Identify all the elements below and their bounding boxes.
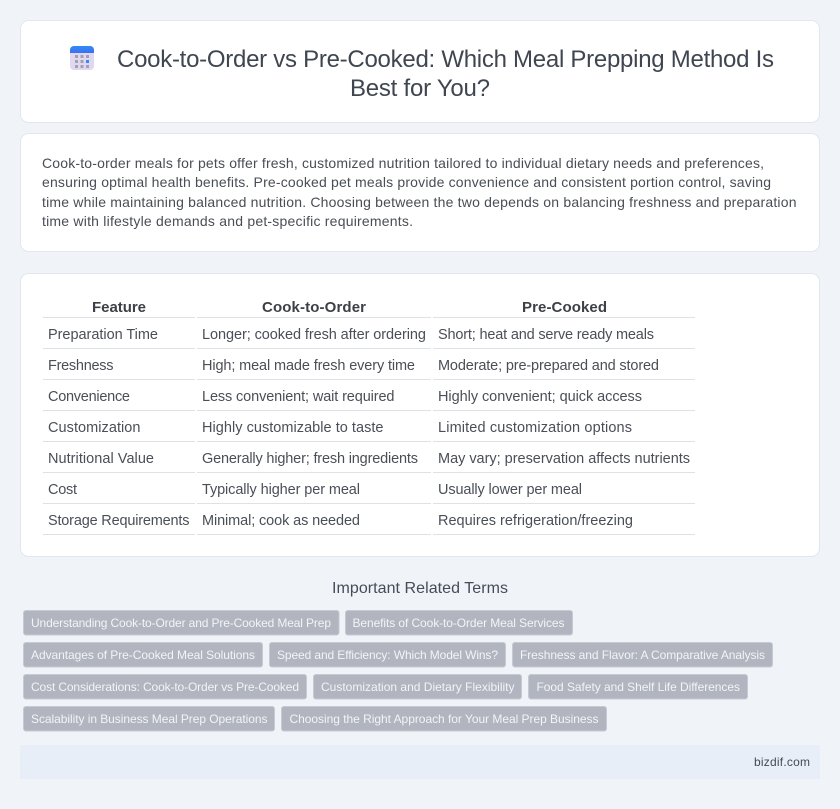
tag: freshness <box>512 642 772 667</box>
tag: scalability <box>24 706 274 731</box>
table row: storage requirements: Requires refrigeration/freezing <box>438 513 633 529</box>
tag: cost <box>24 674 306 699</box>
tag: food safety <box>528 674 748 699</box>
table row: freshness: Moderate; pre-prepared and stored <box>438 358 659 374</box>
table row: customization <box>48 420 632 436</box>
tag: advantages <box>24 642 262 667</box>
panel: introduction <box>20 134 820 252</box>
panel: header <box>20 20 820 122</box>
panel: comparison table <box>20 274 820 556</box>
tag: speed <box>270 642 506 667</box>
tag: food safety: Food Safety and Shelf Life Differences <box>536 680 740 694</box>
title <box>117 46 774 102</box>
table row: cost <box>48 482 582 498</box>
table row: storage requirements <box>48 513 633 529</box>
tag: freshness: Freshness and Flavor: A Comparative Analysis <box>520 648 765 662</box>
table row: cost: Typically higher per meal <box>202 482 360 498</box>
table row: customization: Highly customizable to taste <box>202 420 384 436</box>
table row: convenience: Less convenient; wait required <box>202 389 394 405</box>
table row: preparation time: Preparation Time <box>48 327 158 343</box>
table row: freshness: High; meal made fresh every time <box>202 358 415 374</box>
table row: freshness: Freshness <box>48 358 114 374</box>
icon: calendar <box>70 46 94 70</box>
tag: customization <box>314 674 522 699</box>
table row: nutritional value: May vary; preservation affects nutrients <box>438 451 690 467</box>
tag: speed: Speed and Efficiency: Which Model Wins? <box>277 648 498 662</box>
table header <box>92 299 607 316</box>
tag: choosing <box>282 706 606 731</box>
tag: understanding: Understanding Cook-to-Order and Pre-Cooked Meal Prep <box>31 616 331 630</box>
panel: related term tags <box>24 610 772 731</box>
table row: customization: Limited customization options <box>438 420 632 436</box>
table row: convenience: Highly convenient; quick access <box>438 389 642 405</box>
table row: cost: Usually lower per meal <box>438 482 582 498</box>
table row: nutritional value: Nutritional Value <box>48 451 154 467</box>
text block: introduction: Cook-to-order meals for pets offer fresh, customized nutrition tailored to individual dietary needs and preferences, <box>42 155 764 171</box>
table row: convenience <box>48 389 642 405</box>
table row: convenience: Convenience <box>48 389 130 405</box>
table row: preparation time: Longer; cooked fresh after ordering <box>202 327 426 343</box>
title: Best for You? <box>350 75 490 102</box>
tag: advantages: Advantages of Pre-Cooked Meal Solutions <box>31 648 255 662</box>
table row: nutritional value <box>48 451 690 467</box>
title: Cook-to-Order vs Pre-Cooked: Which Meal Prepping Method Is <box>117 46 774 73</box>
table row: cost: Cost <box>48 482 77 498</box>
tag: customization: Customization and Dietary Flexibility <box>321 680 514 694</box>
tag: choosing: Choosing the Right Approach for Your Meal Prep Business <box>290 712 598 726</box>
tag: scalability: Scalability in Business Meal Prep Operations <box>31 712 268 726</box>
tag: understanding <box>24 610 339 635</box>
table row: storage requirements: Minimal; cook as needed <box>202 513 360 529</box>
tag: benefits <box>346 610 572 635</box>
text block: introduction: time with lifestyle demands and pet-specific requirements. <box>42 213 413 229</box>
table row: preparation time <box>48 327 654 343</box>
footer <box>20 745 820 779</box>
table header: Pre-Cooked <box>522 299 607 316</box>
table row: preparation time: Short; heat and serve ready meals <box>438 327 654 343</box>
text block: introduction: time while maintaining balanced nutrition. Choosing between the two depends on balancing freshness and preparation <box>42 194 796 210</box>
footer: bizdif.com <box>754 755 810 769</box>
text block: introduction: ensuring optimal health benefits. Pre-cooked pet meals provide convenience and consistent portion control, saving <box>42 174 771 190</box>
table row: storage requirements: Storage Requirements <box>48 513 190 529</box>
heading: important related terms: Important Related Terms <box>332 580 508 597</box>
tag: cost: Cost Considerations: Cook-to-Order vs Pre-Cooked <box>31 680 299 694</box>
tag: benefits: Benefits of Cook-to-Order Meal Services <box>352 616 564 630</box>
table header: Cook-to-Order <box>262 299 366 316</box>
table row: freshness <box>48 358 659 374</box>
text block: introduction <box>42 155 796 229</box>
table row: nutritional value: Generally higher; fresh ingredients <box>202 451 418 467</box>
table row: customization: Customization <box>48 420 140 436</box>
table header: Feature <box>92 299 146 316</box>
